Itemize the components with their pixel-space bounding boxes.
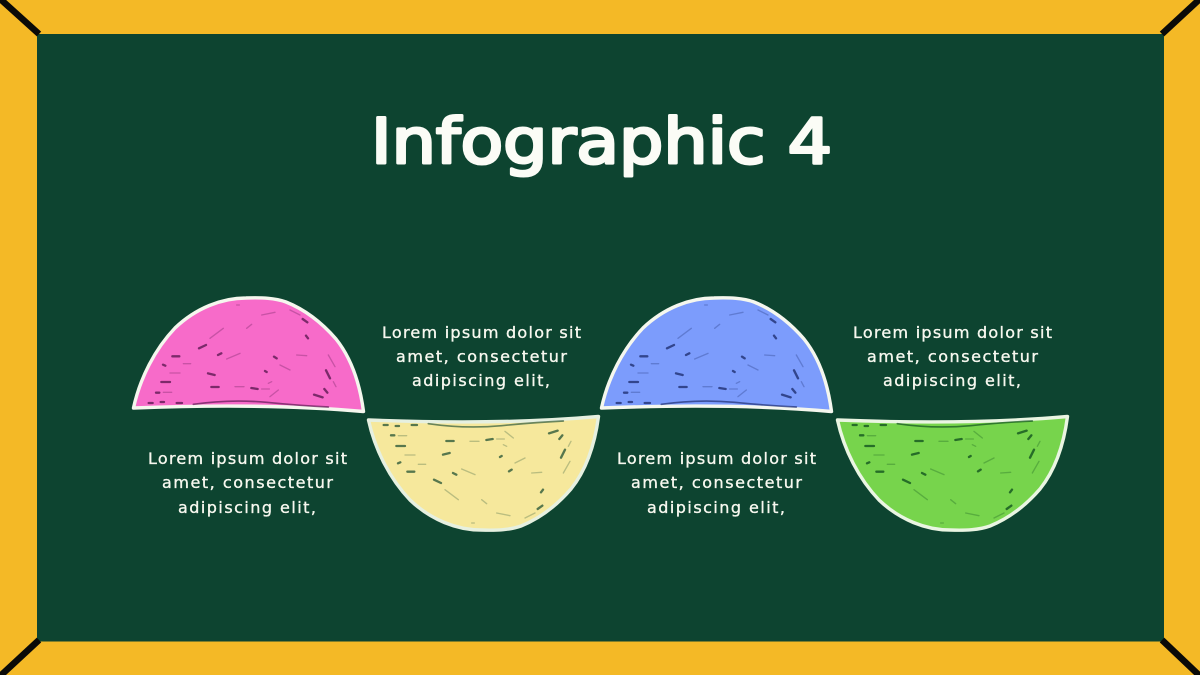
text block: under blue: amet, consectetur [631, 473, 802, 492]
text block: above green: amet, consectetur [867, 347, 1038, 366]
text block: under blue [617, 449, 816, 517]
text block: above green [853, 323, 1052, 390]
text block: under pink [148, 449, 347, 517]
semicircle: blue [602, 298, 832, 412]
text block: above green: Lorem ipsum dolor sit [853, 323, 1052, 342]
text block: above yellow [382, 323, 581, 390]
text block: above green: adipiscing elit, [883, 371, 1021, 390]
semicircle: yellow [368, 416, 598, 530]
text block: under blue: Lorem ipsum dolor sit [617, 449, 816, 468]
semicircle: pink [134, 298, 364, 412]
text block: above yellow: adipiscing elit, [412, 371, 550, 390]
title: Infographic 4 [371, 105, 832, 178]
text block: under blue: adipiscing elit, [647, 498, 785, 517]
text block: above yellow: Lorem ipsum dolor sit [382, 323, 581, 342]
text block: under pink: Lorem ipsum dolor sit [148, 449, 347, 468]
text block: under pink: adipiscing elit, [178, 498, 316, 517]
text block: under pink: amet, consectetur [162, 473, 333, 492]
text block: above yellow: amet, consectetur [396, 347, 567, 366]
semicircle: green [838, 416, 1068, 530]
